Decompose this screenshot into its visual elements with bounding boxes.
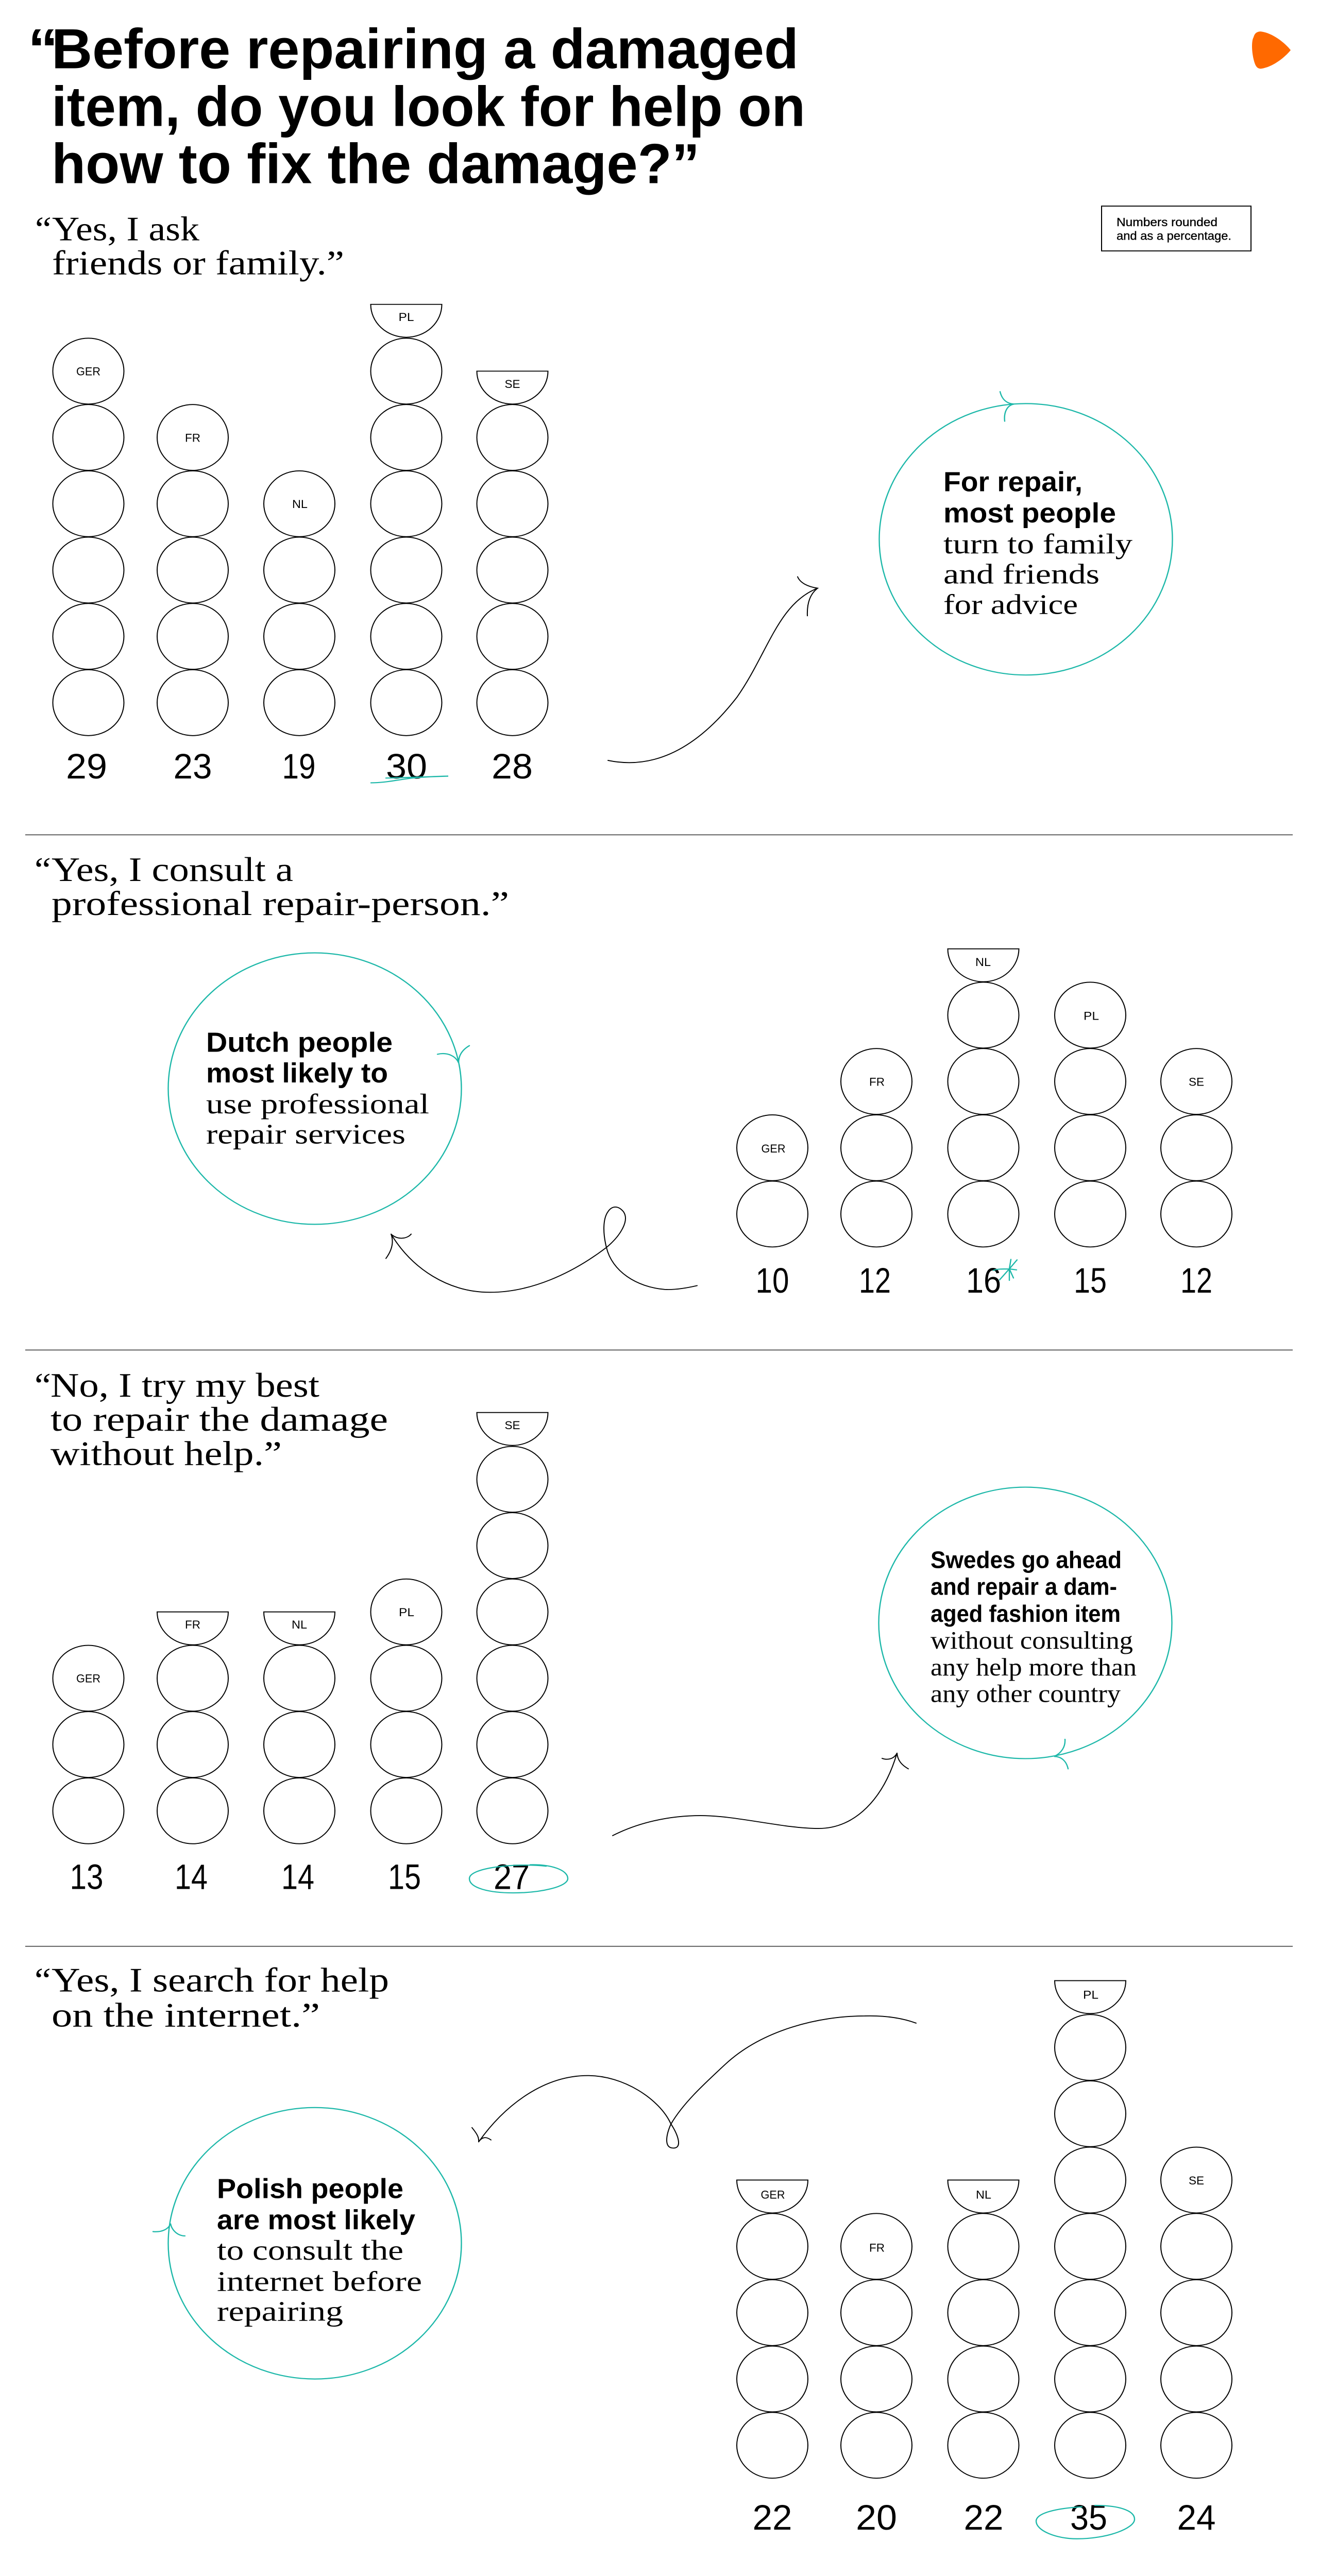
chart: friends or family bbox=[53, 304, 548, 786]
column: NL 19: 19 bbox=[282, 747, 316, 786]
column: NL 16 bbox=[948, 949, 1019, 1301]
panel: repair without help bbox=[35, 1367, 1172, 1897]
column: FR 14: 14 bbox=[175, 1857, 208, 1897]
column: GER 13: 13 bbox=[70, 1857, 104, 1897]
column: PL 30: PL bbox=[399, 311, 414, 324]
column: PL 15: 15 bbox=[1074, 1261, 1107, 1301]
title bbox=[28, 18, 805, 196]
title: “ bbox=[28, 18, 58, 80]
note: numbers rounded: Numbers rounded bbox=[1117, 216, 1217, 229]
column: PL 15 bbox=[371, 1579, 442, 1897]
callout: Dutch people: Dutch people bbox=[206, 1027, 393, 1058]
column: NL 19: NL bbox=[292, 498, 308, 511]
column: PL 35 bbox=[1055, 1980, 1126, 2538]
column: NL 16: NL bbox=[975, 956, 991, 969]
panel: professional repair-person bbox=[35, 851, 1232, 1301]
column: GER 29 bbox=[53, 338, 124, 786]
column: PL 35: 35 bbox=[1070, 2498, 1107, 2538]
callout: Dutch people bbox=[168, 953, 469, 1224]
highlight ring: 35 bbox=[1036, 2505, 1135, 2539]
column: GER 10 bbox=[737, 1115, 808, 1301]
heading: friends or family bbox=[35, 210, 344, 282]
column: NL 14 bbox=[264, 1612, 335, 1897]
title: how to fix the damage?” bbox=[52, 133, 700, 196]
column: GER 13: GER bbox=[76, 1672, 100, 1685]
column: GER 22 bbox=[737, 2180, 808, 2538]
column: FR 23: 23 bbox=[173, 747, 212, 786]
title: item, do you look for help on bbox=[52, 75, 805, 138]
column: GER 10: 10 bbox=[756, 1261, 789, 1301]
chart: search the internet bbox=[737, 1980, 1232, 2538]
column: FR 12: FR bbox=[869, 1075, 885, 1088]
heading: repair without help: without help.” bbox=[50, 1435, 282, 1473]
column: FR 20: 20 bbox=[856, 2498, 897, 2538]
column: FR 20: FR bbox=[869, 2241, 885, 2254]
column: SE 27 bbox=[477, 1413, 548, 1897]
note: numbers rounded: and as a percentage. bbox=[1117, 230, 1231, 243]
arrow: chart to callout bbox=[472, 2016, 916, 2148]
column: PL 15: 15 bbox=[388, 1857, 421, 1897]
callout: Polish people: to consult the bbox=[217, 2234, 403, 2266]
callout: Swedes: aged fashion item bbox=[931, 1601, 1121, 1628]
callout: family and friends: most people bbox=[943, 497, 1116, 528]
chart: repair without help bbox=[53, 1413, 548, 1897]
arrow: chart to callout bbox=[613, 1753, 908, 1836]
column: FR 23: FR bbox=[185, 431, 200, 444]
column: GER 22: 22 bbox=[752, 2498, 792, 2538]
column: FR 23 bbox=[157, 404, 228, 786]
column: PL 15: PL bbox=[399, 1606, 414, 1619]
panel: friends or family bbox=[35, 210, 1173, 786]
column: FR 20 bbox=[841, 2213, 912, 2538]
column: FR 14 bbox=[157, 1612, 228, 1897]
column: SE 24: 24 bbox=[1177, 2498, 1216, 2538]
chart: professional repair-person bbox=[737, 949, 1232, 1301]
column: PL 35: PL bbox=[1083, 1988, 1098, 2001]
callout: family and friends: For repair, bbox=[943, 466, 1083, 497]
column: NL 14: NL bbox=[292, 1618, 307, 1631]
column: NL 14: 14 bbox=[281, 1857, 314, 1897]
column: SE 28: SE bbox=[505, 378, 520, 391]
column: SE 12 bbox=[1161, 1048, 1232, 1301]
callout: Dutch people: most likely to bbox=[206, 1057, 388, 1088]
column: SE 27: SE bbox=[505, 1419, 520, 1432]
heading: professional repair-person bbox=[35, 851, 509, 923]
highlight ring: 27 bbox=[469, 1865, 568, 1893]
column: PL 30: 30 bbox=[386, 747, 427, 786]
panel: search the internet bbox=[35, 1961, 1232, 2539]
highlight star: 16 bbox=[993, 1259, 1017, 1280]
callout: Swedes: any help more than bbox=[931, 1653, 1137, 1681]
callout: Swedes: Swedes go ahead bbox=[931, 1547, 1122, 1573]
callout: Polish people bbox=[153, 2108, 462, 2379]
heading: friends or family: “ bbox=[35, 210, 52, 248]
heading: search the internet: “ bbox=[35, 1961, 51, 1999]
title: Before repairing a damaged bbox=[52, 18, 799, 80]
callout: Swedes bbox=[879, 1487, 1172, 1769]
heading: repair without help: to repair the damage bbox=[50, 1400, 388, 1438]
column: GER 29: GER bbox=[76, 365, 100, 378]
callout: Swedes: and repair a dam- bbox=[931, 1573, 1117, 1600]
column: FR 14: FR bbox=[185, 1618, 200, 1631]
column: PL 30 bbox=[371, 304, 442, 786]
column: FR 12: 12 bbox=[859, 1261, 891, 1301]
note: numbers rounded bbox=[1102, 206, 1251, 251]
column: SE 28 bbox=[477, 371, 548, 786]
callout: Polish people: internet before bbox=[217, 2265, 422, 2297]
column: GER 13 bbox=[53, 1646, 124, 1897]
column: SE 24 bbox=[1161, 2147, 1232, 2538]
column: NL 22 bbox=[948, 2180, 1019, 2538]
column: FR 12 bbox=[841, 1048, 912, 1301]
heading: search the internet: on the internet.” bbox=[52, 1996, 320, 2035]
callout: family and friends bbox=[879, 392, 1173, 675]
heading: professional repair-person: “ bbox=[35, 851, 51, 889]
heading: professional repair-person: professional repair-person.” bbox=[52, 885, 509, 923]
icon: orange logo bbox=[1252, 31, 1291, 69]
heading: search the internet bbox=[35, 1961, 389, 2035]
callout: Dutch people: repair services bbox=[206, 1117, 405, 1150]
callout: family and friends: turn to family bbox=[943, 528, 1132, 560]
heading: friends or family: Yes, I ask bbox=[52, 210, 199, 248]
column: GER 22: GER bbox=[761, 2188, 785, 2201]
callout: family and friends: and friends bbox=[943, 557, 1100, 590]
column: NL 16: 16 bbox=[966, 1261, 1001, 1301]
callout: Polish people: Polish people bbox=[217, 2173, 403, 2204]
heading: repair without help: No, I try my best bbox=[50, 1367, 319, 1404]
column: PL 15 bbox=[1055, 982, 1126, 1301]
callout: Swedes: any other country bbox=[931, 1680, 1121, 1707]
callout: Swedes: without consulting bbox=[931, 1626, 1133, 1654]
column: NL 19 bbox=[264, 471, 335, 786]
heading: professional repair-person: Yes, I consult a bbox=[52, 851, 293, 889]
column: SE 24: SE bbox=[1189, 2174, 1204, 2187]
column: NL 22: 22 bbox=[963, 2498, 1004, 2538]
callout: family and friends: for advice bbox=[943, 588, 1078, 620]
column: SE 12: SE bbox=[1189, 1075, 1204, 1088]
underline highlight: 30 bbox=[371, 776, 448, 783]
heading: repair without help bbox=[35, 1367, 388, 1473]
heading: friends or family: friends or family.” bbox=[52, 244, 344, 282]
column: GER 10: GER bbox=[762, 1142, 786, 1155]
column: PL 15: PL bbox=[1084, 1009, 1099, 1022]
column: SE 28: 28 bbox=[492, 747, 533, 786]
arrow: chart to callout bbox=[608, 577, 818, 762]
callout: Polish people: are most likely bbox=[217, 2204, 415, 2235]
column: NL 22: NL bbox=[976, 2188, 991, 2201]
column: SE 12: 12 bbox=[1180, 1261, 1212, 1301]
callout: Dutch people: use professional bbox=[206, 1088, 429, 1120]
heading: repair without help: “ bbox=[35, 1367, 51, 1404]
column: GER 29: 29 bbox=[66, 747, 107, 786]
column: SE 27: 27 bbox=[494, 1857, 530, 1897]
callout: Polish people: repairing bbox=[217, 2295, 343, 2327]
heading: search the internet: Yes, I search for help bbox=[52, 1961, 389, 1999]
arrow: chart to callout bbox=[386, 1207, 697, 1292]
